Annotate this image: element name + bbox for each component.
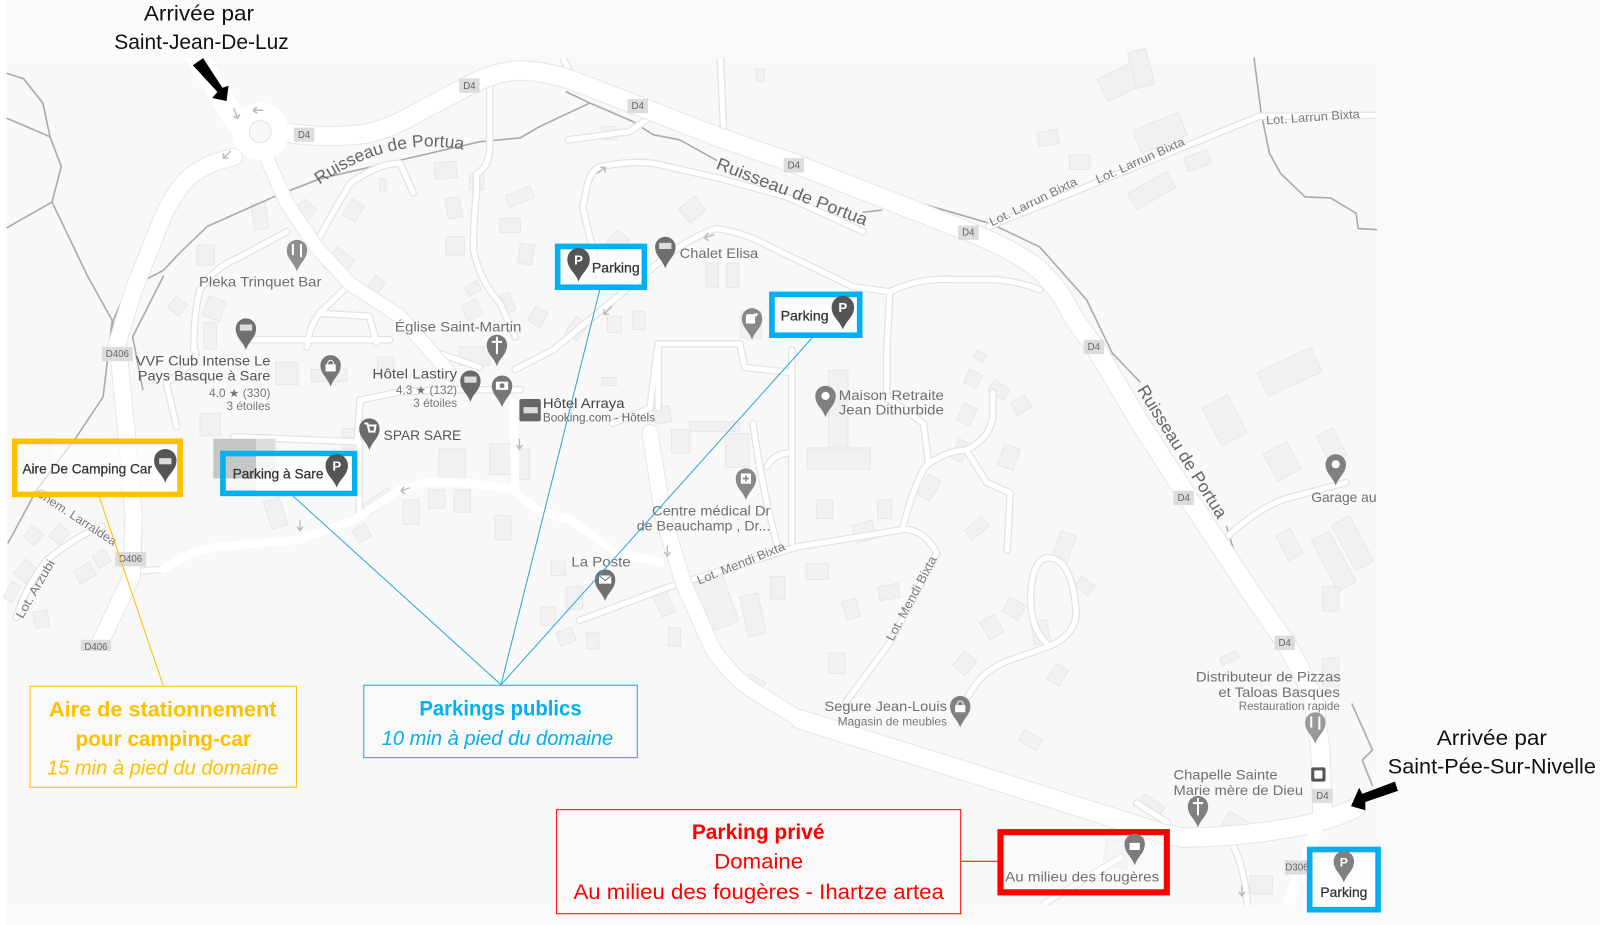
stream and street names: Ruisseau de Portua: [714, 153, 871, 230]
place labels: Jean Dithurbide: [839, 402, 944, 418]
stream and street names: Lot. Larrun Bixta: [987, 175, 1080, 229]
hotel Arraya icon: [519, 399, 541, 421]
road shields: D406: [106, 349, 129, 360]
place labels: Centre médical Dr: [652, 503, 771, 519]
road shields: D4: [1278, 638, 1291, 649]
arrow: from Saint-Pée-Sur-Nivelle: [1351, 782, 1398, 810]
place labels: Restauration rapide: [1239, 700, 1340, 713]
place labels: Marie mère de Dieu: [1173, 783, 1303, 799]
road shields: D4: [962, 228, 975, 239]
stream and street names: Lot. Mendi Bixta: [883, 554, 940, 643]
arrow: from Saint-Jean-De-Luz: [193, 58, 229, 101]
place labels: 4.3 ★ (132): [396, 384, 457, 397]
stream and street names: [13, 107, 1360, 683]
stream and street names: Ruisseau de Portua: [314, 135, 464, 184]
marker: parking south-east: Parking: [1320, 885, 1367, 900]
place labels: Magasin de meubles: [838, 716, 947, 729]
road shields: D4: [1177, 493, 1190, 504]
road shields: D4: [632, 101, 645, 112]
place labels: Pleka Trinquet Bar: [199, 275, 322, 291]
buildings: [3, 48, 1374, 894]
place labels: Pays Basque à Sare: [138, 369, 270, 385]
parking lot block: [213, 439, 276, 479]
place labels: 3 étoiles: [413, 397, 457, 410]
marker: camping-car area: Aire De Camping Car: [22, 461, 152, 476]
arrival label: Saint-Jean-De-Luz: [114, 1, 289, 54]
callout: camping-car: 15 min à pied du domaine: [47, 757, 279, 779]
place labels: [136, 246, 1377, 799]
marker: parking à Sare: [223, 454, 355, 493]
marker: private parking: Au milieu des fougères: [1005, 870, 1159, 886]
callout: camping-car: Aire de stationnement: [49, 697, 277, 721]
arrival label: Saint-Pée-Sur-Nivelle: Saint-Pée-Sur-Nivelle: [1388, 754, 1596, 778]
place labels: Hôtel Lastiry: [372, 367, 458, 383]
road shields: D4: [298, 130, 311, 141]
callout: private parking: Parking privé: [692, 820, 825, 844]
marker: parking east: P: [838, 300, 847, 315]
arrival label: Saint-Jean-De-Luz: Saint-Jean-De-Luz: [114, 30, 289, 54]
stream and street names: Lot. Mendi Bixta: [695, 539, 787, 587]
stream and street names: Lot. Larrun Bixta: [1266, 107, 1360, 127]
road junctions: [223, 103, 1245, 896]
marker: parking north: [558, 246, 644, 287]
place labels: Chalet Elisa: [680, 246, 758, 262]
map area: [2, 48, 1378, 905]
road shields: D406: [119, 554, 142, 565]
main roads: [100, 51, 1355, 900]
place labels: Distributeur de Pizzas: [1196, 670, 1341, 686]
place labels: Garage au: [1311, 490, 1377, 506]
callout leader lines: [99, 289, 998, 861]
marker: private parking: [1001, 832, 1167, 892]
road shields: D4: [463, 81, 476, 92]
minor roads: [16, 58, 1377, 903]
place labels: et Taloas Basques: [1218, 685, 1340, 701]
callout: public parking: 10 min à pied du domaine: [382, 728, 613, 750]
place labels: Église Saint-Martin: [395, 319, 521, 336]
stream and street names: Chem. Larraldea: [33, 486, 120, 549]
bus stop icon: [1311, 767, 1326, 782]
callout: public parking: Parkings publics: [419, 696, 582, 720]
marker: parking north: P: [574, 252, 583, 267]
callout: private parking: Au milieu des fougères - Ihartze artea: [573, 880, 944, 904]
place labels: de Beauchamp , Dr...: [637, 519, 770, 535]
place labels: La Poste: [571, 554, 631, 570]
place labels: SPAR SARE: [384, 428, 461, 444]
place labels: 3 étoiles: [227, 400, 271, 413]
road shields: D4: [1088, 342, 1101, 353]
arrival label: Saint-Jean-De-Luz: Arrivée par: [144, 1, 254, 25]
callout: camping-car: [30, 686, 296, 787]
callout: private parking: Domaine: [714, 849, 803, 873]
arrival label: Saint-Pée-Sur-Nivelle: Arrivée par: [1437, 726, 1547, 750]
stream and street names: Ruisseau de Portua: [1133, 381, 1232, 522]
road shields: D4: [788, 160, 801, 171]
marker: parking east: Parking: [781, 308, 829, 323]
stream and street names: Lot. Larrun Bixta: [1093, 135, 1187, 186]
place labels: Maison Retraite: [839, 388, 944, 404]
marker: parking à Sare: Parking à Sare: [233, 467, 324, 482]
road shields: D406: [84, 642, 108, 653]
marker: parking east: [772, 294, 860, 335]
place labels: Segure Jean-Louis: [824, 699, 947, 715]
marker: parking south-east: [1310, 849, 1378, 910]
road shields: D4: [1316, 791, 1329, 802]
marker: camping-car area: [15, 441, 180, 494]
streams: [7, 58, 1377, 786]
place labels: Hôtel Arraya: [543, 396, 625, 412]
place labels: 4.0 ★ (330): [209, 387, 270, 400]
marker: parking à Sare: P: [332, 458, 341, 473]
callout: private parking: [557, 810, 961, 914]
marker: parking north: Parking: [592, 260, 640, 275]
stream and street names: Lot. Arzubi: [13, 557, 58, 621]
map pins: [236, 237, 1346, 828]
road shields: D306: [1285, 862, 1309, 873]
callout: camping-car: pour camping-car: [76, 727, 251, 751]
road shields: [81, 79, 1333, 874]
place labels: VVF Club Intense Le: [136, 353, 270, 369]
arrival label: Saint-Pée-Sur-Nivelle: [1388, 726, 1596, 778]
place labels: Chapelle Sainte: [1173, 768, 1278, 784]
marker: parking south-east: P: [1340, 855, 1348, 869]
place labels: Booking.com - Hôtels: [543, 411, 655, 424]
callout: public parking: [364, 685, 637, 758]
